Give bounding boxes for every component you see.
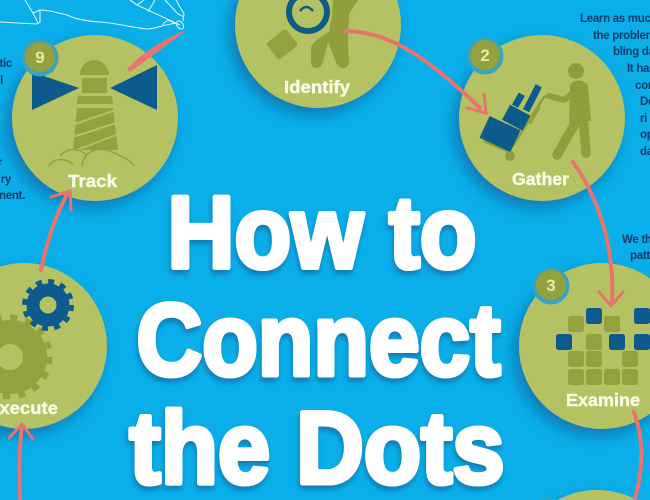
arrow: Examine to next step [634, 412, 641, 498]
step 8: Execute [0, 263, 107, 429]
arrow: Identify to Gather [345, 31, 486, 113]
icon: gears [0, 282, 72, 396]
text: step 3 description: patt [630, 250, 650, 262]
step 9: Track [12, 35, 178, 201]
label: Examine: Examine [566, 390, 640, 410]
badge: 9: 9 [35, 48, 45, 67]
step 1: Identify [235, 0, 401, 108]
arrow: Gather to Examine [573, 162, 623, 306]
icon: person with magnifying glass [266, 0, 358, 68]
title [130, 176, 504, 500]
step 2: Gather [459, 35, 625, 201]
icon: grid of squares [556, 308, 650, 385]
label: Gather: Gather [512, 169, 569, 189]
text: step 9 description: l [0, 75, 3, 87]
arrow: Track to hand [128, 32, 183, 71]
badge: 3 [532, 268, 570, 304]
badge: 2 [466, 38, 504, 74]
illustration: hand outline holding pen [0, 0, 185, 30]
text: step 9 description [0, 58, 25, 202]
badge: 9 [22, 40, 58, 76]
badge: 3: 3 [546, 276, 556, 295]
text: step 3 description [622, 234, 650, 262]
text: step 2 description [580, 13, 650, 158]
label: Identify: Identify [284, 77, 350, 97]
arrow: Execute to Track [41, 191, 71, 270]
icon: lighthouse [32, 60, 157, 172]
step 3: Examine [519, 263, 650, 429]
text: step 9 description: ry [1, 174, 12, 186]
badge: 4 [540, 498, 556, 500]
badge: 2: 2 [480, 46, 490, 65]
step 4: partially visible circle [558, 490, 636, 500]
title: Connect [136, 283, 500, 397]
icon: person pushing hand truck [480, 63, 590, 161]
title: How to [168, 176, 476, 290]
arrow: into Execute [9, 424, 33, 498]
label: Track: Track [68, 171, 117, 191]
text: step 2 description: ri [640, 113, 647, 125]
